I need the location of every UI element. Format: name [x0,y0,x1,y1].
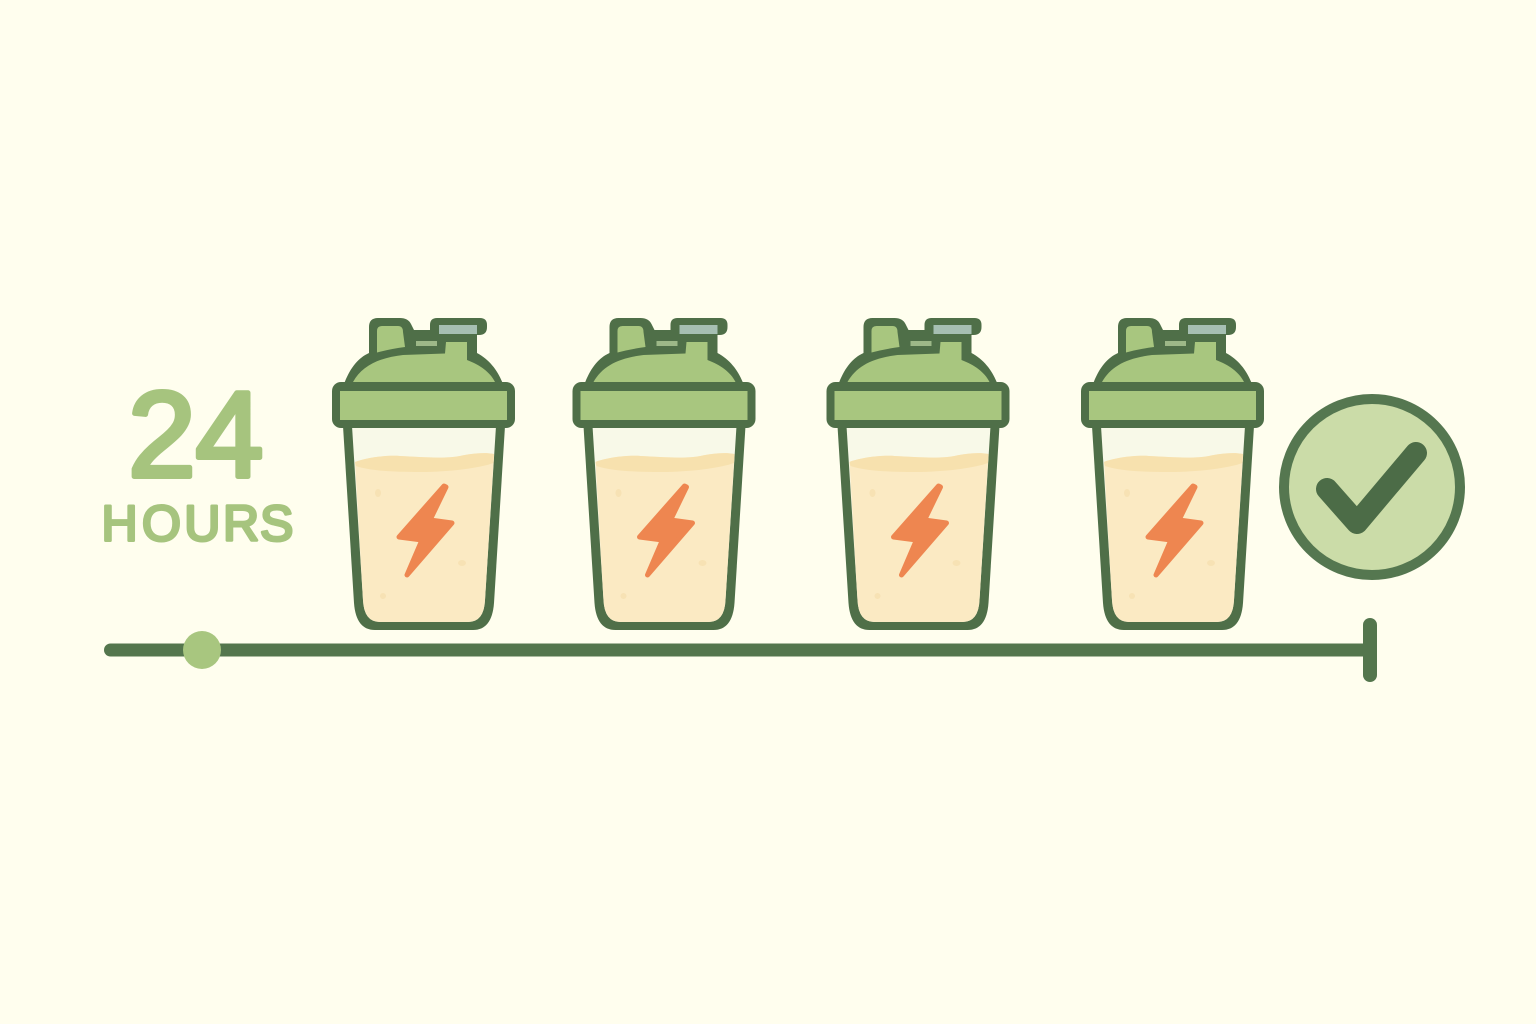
timeline bar [104,644,1374,656]
liquid specks [616,489,706,599]
liquid surface [355,453,494,472]
lid band [1081,382,1264,428]
shaker 1 [332,318,515,630]
lid band [826,382,1010,428]
cap window [1188,325,1226,334]
bolt icon [1148,486,1201,575]
body outline [1092,426,1254,630]
check mark [1327,453,1416,523]
pour slot [656,341,678,346]
empty top of cup [592,426,736,622]
badge circle [1284,399,1460,575]
empty top of cup [352,426,496,622]
liquid surface [596,453,734,472]
flap [618,326,646,352]
heading: 24 hours [102,366,293,552]
body outline [343,426,505,630]
lid silhouette [344,318,503,384]
dome lid [353,342,495,382]
cap window [934,325,972,334]
bolt icon [894,486,946,575]
lid band [572,382,756,428]
number 24: 24 [128,366,263,502]
flap [377,326,405,352]
cap window [680,325,718,334]
body outline [584,426,746,630]
pour slot [416,341,437,346]
lid band fill [834,391,1002,420]
timeline end marker [1363,618,1377,682]
shaker 3 [826,318,1010,630]
dome lid [848,342,990,382]
empty top of cup [846,426,990,622]
lid silhouette [838,318,998,384]
liquid specks [870,489,960,599]
icon: check mark badge [1284,399,1460,575]
lid silhouette [584,318,744,384]
lid band [332,382,515,428]
lid silhouette [1093,318,1252,384]
liquid surface [1104,453,1243,472]
dome lid [594,342,736,382]
timeline [104,618,1377,682]
bolt icon [399,486,452,575]
liquid specks [1124,489,1215,599]
flap [1126,326,1154,352]
cap window [439,325,477,334]
label HOURS: HOURS [102,496,293,552]
liquid specks [375,489,466,599]
body outline [838,426,1000,630]
liquid [355,453,494,622]
empty top of cup [1101,426,1245,622]
liquid surface [850,453,988,472]
timeline start dot [183,631,221,669]
liquid [596,453,734,622]
lid band fill [580,391,748,420]
shaker 2 [572,318,756,630]
liquid [850,453,988,622]
pour slot [910,341,932,346]
bolt icon [640,486,692,575]
lid band fill [1089,391,1256,420]
dome lid [1102,342,1244,382]
lid band fill [340,391,507,420]
liquid [1104,453,1243,622]
flap [872,326,900,352]
pour slot [1165,341,1186,346]
shaker 4 [1081,318,1264,630]
